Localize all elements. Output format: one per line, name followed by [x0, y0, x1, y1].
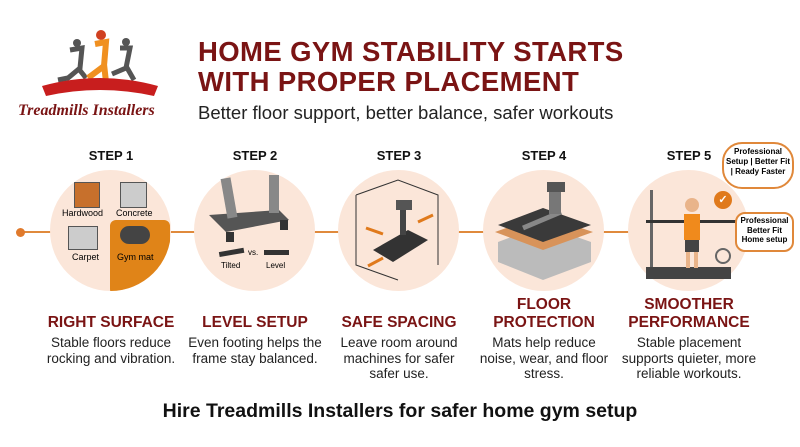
- step 2: STEP 2: [233, 148, 277, 163]
- title: WITH PROPER PLACEMENT: [198, 66, 579, 97]
- callout: better fit: Professional Better Fit Home setup: [740, 216, 788, 244]
- icon: leveling feet: Level: [266, 261, 285, 270]
- heading: LEVEL SETUP: [202, 314, 308, 331]
- step 1: [47, 148, 175, 366]
- icon: surfaces: Hardwood: [62, 208, 103, 218]
- callout: better fit: [735, 212, 794, 252]
- timeline line: [20, 231, 720, 233]
- text: Stable floors reduce rocking and vibration.: [47, 335, 175, 366]
- text: Stable placement supports quieter, more reliable workouts.: [622, 335, 756, 381]
- step 1: STEP 1: [89, 148, 133, 163]
- icon: check: [714, 191, 732, 209]
- heading: [493, 296, 595, 331]
- icon: floor layers: [483, 170, 604, 291]
- icon: home gym: [628, 170, 749, 291]
- icon: surfaces: Carpet: [72, 252, 99, 262]
- heading: PROTECTION: [493, 314, 595, 331]
- text: Even footing helps the frame stay balanced.: [188, 335, 322, 366]
- heading: [628, 296, 750, 331]
- text: Mats help reduce noise, wear, and floor stress.: [480, 335, 608, 381]
- logo: [18, 30, 158, 119]
- title: HOME GYM STABILITY STARTS: [198, 36, 624, 67]
- heading: SAFE SPACING: [341, 314, 457, 331]
- icon: leveling feet: [194, 170, 315, 291]
- callout: professional setup: [722, 142, 794, 189]
- icon: surfaces: Concrete: [116, 208, 153, 218]
- step 3: [338, 148, 459, 381]
- heading: FLOOR: [517, 296, 571, 313]
- icon: check: ✓: [718, 194, 728, 206]
- footer: Hire Treadmills Installers for safer home gym setup: [163, 400, 637, 422]
- callout: professional setup: Professional Setup | Better Fit | Ready Faster: [726, 147, 790, 176]
- icon: spacing: [338, 170, 459, 291]
- title: [198, 36, 624, 97]
- heading: SMOOTHER: [644, 296, 734, 313]
- icon: surfaces: Gym mat: [117, 252, 154, 262]
- subtitle: Better floor support, better balance, safer workouts: [198, 102, 613, 123]
- icon: runners: [42, 30, 158, 96]
- icon: surfaces: [50, 170, 171, 291]
- step 4: [480, 148, 608, 381]
- text: Leave room around machines for safer safer use.: [340, 335, 458, 381]
- icon: leveling feet: Tilted: [221, 261, 240, 270]
- step 2: [188, 148, 322, 366]
- step 5: [622, 148, 756, 381]
- heading: RIGHT SURFACE: [48, 314, 174, 331]
- logo text: Treadmills Installers: [18, 102, 155, 119]
- heading: PERFORMANCE: [628, 314, 750, 331]
- icon: leveling feet: vs.: [248, 248, 258, 257]
- step 4: STEP 4: [522, 148, 566, 163]
- step 3: STEP 3: [377, 148, 421, 163]
- step 5: STEP 5: [667, 148, 711, 163]
